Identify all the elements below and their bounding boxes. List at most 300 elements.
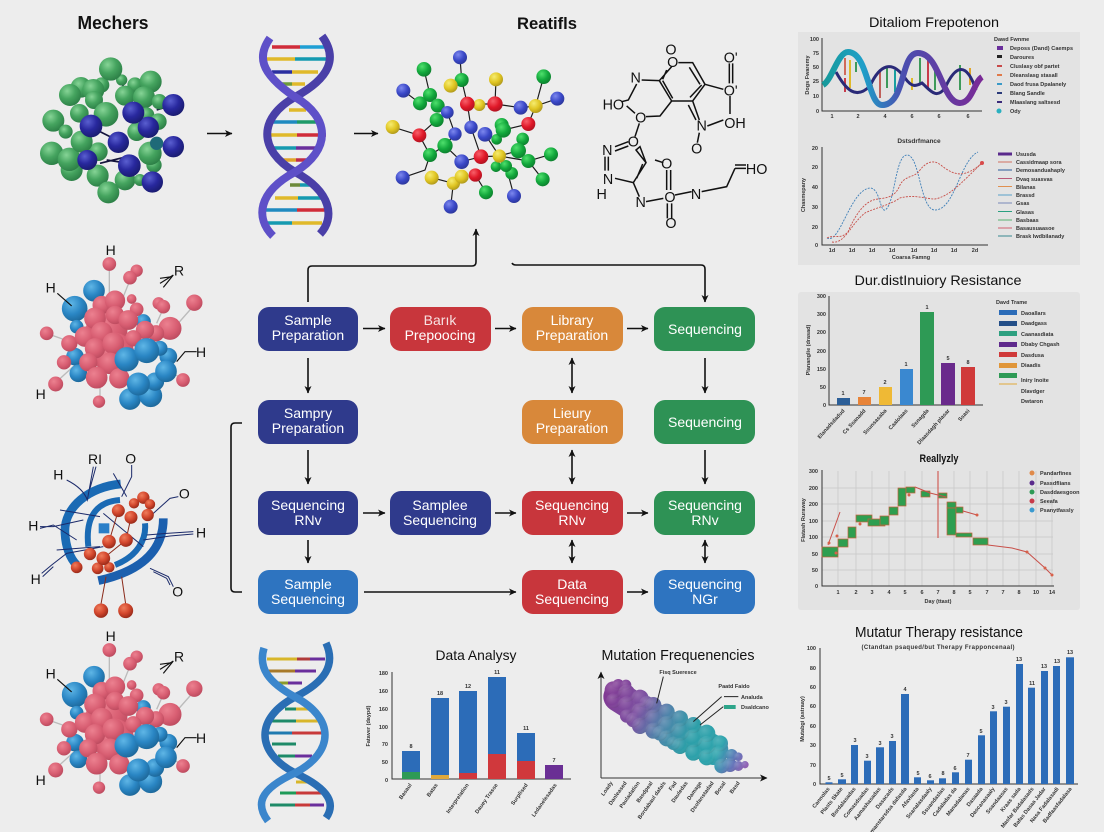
chart: resistance bars: 150 (817, 367, 826, 373)
flow bracket (231, 423, 242, 592)
flow box: Sequencing RNv red: RNv (558, 512, 586, 528)
heading: Data Analysy: Data Analysy (436, 647, 516, 663)
chart: dashed curves: 1d (849, 248, 855, 254)
chart: dashed curves: Gsas (1016, 201, 1029, 207)
chart: DNA waveform: 6 (937, 114, 941, 120)
flow box: Library Preparation (522, 307, 623, 351)
chemical structure diagram (596, 43, 767, 232)
chart: DNA waveform: 25 (813, 79, 819, 85)
flow box: Sample Sequencing (258, 570, 358, 614)
molecule: pink and blue cluster, row 4: R (174, 649, 184, 665)
chart: dashed curves: Glasas (1016, 210, 1034, 216)
flow box: Bank Prepoocing (390, 307, 491, 351)
chart: DNA waveform: Dogs Fwaremy (805, 54, 811, 95)
flow box: Sample Preparation: Preparation (272, 327, 344, 343)
chart: DNA waveform: Deposs (Dand) Caemps (1010, 46, 1073, 52)
flow box: Library Preparation: Library (551, 312, 593, 328)
chart: dashed curves: 0 (815, 243, 818, 249)
chart: data analysis stacked bars: 12 (465, 684, 471, 690)
chart: resistance bars: 300 (817, 294, 826, 300)
chart: dashed curves: Dvaq suasvas (1016, 177, 1053, 183)
chemical structure diagram: O (667, 55, 678, 71)
arrow: molecule to DNA (207, 132, 232, 134)
chart: resistance bars: 5 (946, 356, 950, 362)
chart: mutation therapy bars: 3 (991, 705, 995, 711)
chart: resistance bars: Caalolaas (888, 408, 909, 431)
chart: mutation therapy bars: Dasacads (875, 787, 896, 810)
chart: dashed curves: 20 (812, 165, 818, 171)
chart: DNA waveform: 10 (813, 94, 819, 100)
chart: mutation therapy bars: 60 (810, 724, 816, 730)
panel: DNA line charts (798, 32, 1080, 265)
chart: step line chart: 50 (812, 568, 818, 574)
chart: dashed curves: Basbaas (1016, 218, 1039, 224)
chart: resistance bars: 300 (817, 312, 826, 318)
chart: step line chart: 10 (1033, 590, 1039, 596)
chemical structure diagram: N (691, 187, 701, 203)
chart: resistance bars: Cs Ssanadd (842, 408, 867, 436)
chart: mutation frequency blob: Danleased (608, 781, 629, 807)
chart: step line chart: 8 (1017, 590, 1021, 596)
chart: dashed curves: 1d (931, 248, 937, 254)
heading: Mutation Frequenencies: Mutation Frequenencies (602, 648, 754, 664)
molecule: blue ribbon with red spheres: O (179, 485, 190, 501)
chart: step line chart: 2 (854, 590, 858, 596)
chart: step line chart: 0 (815, 584, 818, 590)
chemical structure diagram: O (665, 216, 677, 232)
chart: DNA waveform: Cluslasy obf partet (1010, 64, 1060, 70)
chart: dashed curves: Cassidmaap sora (1016, 160, 1062, 166)
flow box: Sampry Preparation (258, 400, 358, 444)
chart: mutation therapy bars: Ssandaasas (985, 787, 1010, 815)
chart: dashed curves: Demosanduahaply (1016, 168, 1066, 174)
chart: dashed curves: 1d (829, 248, 835, 254)
chart: data analysis stacked bars: Basaul (398, 782, 414, 801)
chart: data analysis stacked bars: 160 (379, 707, 388, 713)
chart: step line chart (801, 469, 1080, 605)
chemical structure diagram: O (691, 141, 702, 157)
chart: dashed curves: 30 (812, 205, 818, 211)
chart: mutation therapy bars: 100 (807, 646, 816, 652)
chart: data analysis stacked bars: 180 (379, 671, 388, 677)
chart: resistance bars: 200 (817, 330, 826, 336)
chart: data analysis stacked bars: 11 (523, 726, 529, 732)
chart: mutation therapy bars: Comasdsadas (843, 787, 871, 820)
chart: mutation therapy bars: 5 (916, 771, 920, 777)
chart: mutation frequency blob: Basd (729, 781, 742, 795)
molecule: pink and blue cluster, row 2: H (36, 386, 46, 402)
molecule: pink and blue cluster, row 2: H (106, 242, 116, 258)
chart: DNA waveform: 75 (813, 51, 819, 57)
chart: mutation frequency blob: Basdpeal (636, 780, 655, 804)
chart: mutation frequency blob: Paatd Faido (718, 684, 750, 690)
chart: resistance bars: Diaadis (1021, 363, 1041, 369)
molecule: pink and blue cluster, row 4: H (106, 628, 116, 644)
flow box: Sequencing: Sequencing (668, 321, 742, 337)
chemical structure diagram: HO (603, 97, 624, 113)
chart: step line chart: 8 (952, 590, 956, 596)
chart: dashed curves (801, 138, 1066, 261)
chart: step line chart: 5 (903, 590, 907, 596)
molecule: pink and blue cluster, row 2: H (196, 344, 206, 360)
chart: data analysis stacked bars: 160 (379, 689, 388, 695)
chemical structure diagram: O (665, 43, 677, 59)
flow box: Bank Prepoocing: Barık (424, 312, 457, 328)
chart: resistance bars: 1 (904, 362, 908, 368)
molecule: blue ribbon with red spheres: O (172, 584, 183, 600)
flow box: Library Preparation: Preparation (536, 327, 608, 343)
chart: step line chart: 300 (809, 469, 818, 475)
chart: mutation therapy bars: Manadalanas (946, 787, 972, 817)
chart: dashed curves: 40 (812, 185, 818, 191)
chart: mutation therapy bars: 8 (941, 771, 945, 777)
molecule: blue ribbon with red spheres: RI (88, 451, 102, 467)
chart: dashed curves: 1d (951, 248, 957, 254)
chemical structure diagram: O (635, 111, 646, 127)
chart: DNA waveform: Mlaaslang saltsesd (1010, 100, 1060, 106)
molecule: pink and blue cluster, row 2: R (174, 263, 184, 279)
flow box: Sequencing (654, 307, 755, 351)
chart: step line chart: 7 (936, 590, 940, 596)
DNA helix: purple (262, 36, 330, 236)
chart: mutation therapy bars: 0 (813, 782, 816, 788)
heading: Mutatur Therapy resistance: Mutatur Therapy resistance (855, 625, 1023, 641)
chart: resistance bars: Davd Trame (996, 300, 1027, 306)
chart: DNA waveform: 1 (830, 114, 834, 120)
chart: mutation therapy bars: Kraas sada (1000, 786, 1023, 813)
heading: Reatifls: Reatifls (517, 14, 577, 33)
subheading: therapy frequencies: (Ctandtan psaqued/but Therapy Frapponcenaal) (862, 645, 1014, 651)
chart: data analysis stacked bars: 8 (409, 744, 413, 750)
chart: resistance bars: 8 (966, 360, 970, 366)
chart: mutation frequency blob: Loady (600, 780, 615, 797)
chart: mutation therapy bars: 7 (966, 753, 970, 759)
chart: mutation therapy bars: Dasaada (966, 786, 985, 808)
heading: Ditaliom Frepotenon: Ditaliom Frepotenon (869, 14, 999, 30)
molecule: blue ribbon with red spheres: H (31, 571, 41, 587)
chart: data analysis stacked bars (366, 670, 571, 818)
chart: dashed curves: Bilanas (1016, 185, 1036, 191)
flow box: Sequencing NGr: Sequencing (668, 576, 742, 592)
chart: DNA waveform: 2 (856, 114, 860, 120)
chart: step line chart: Psanytfassly (1040, 508, 1075, 514)
chart: DNA waveform (805, 37, 1073, 120)
chemical structure diagram: N (630, 71, 641, 87)
chart: mutation frequency blob: Bosal (714, 780, 728, 796)
arrow: DNA to ball and stick (354, 132, 378, 134)
flow box: Sequencing 2 (654, 400, 755, 444)
chart: data analysis stacked bars: 70 (382, 742, 388, 748)
molecule: pink and blue cluster, row 4 (36, 628, 206, 795)
chart: dashed curves: Coarsa Famng (892, 255, 930, 261)
molecule: pink and blue cluster, row 2: H (46, 279, 56, 295)
chart: mutation therapy bars: Cannolas (812, 787, 832, 810)
chart: mutation therapy bars: 3 (878, 741, 882, 747)
chart: dashed curves: Basausuaasoe (1016, 226, 1055, 232)
chart: step line chart: 200 (809, 502, 818, 508)
chart: mutation therapy bars: 3 (1004, 700, 1008, 706)
chart: mutation therapy bars: 5 (840, 773, 844, 779)
flow box: Lieury Preparation (522, 400, 623, 444)
chemical structure diagram: N (602, 143, 613, 159)
chart: step line chart: 14 (1049, 590, 1056, 596)
flow box: Sequencing RNv: Sequencing (271, 497, 345, 513)
chart: resistance bars: Dlaasdagh plasar (917, 408, 952, 446)
chemical structure diagram: O' (724, 83, 738, 99)
chart: mutation frequency blob: Dauledas (671, 781, 690, 804)
flow box: Sequencing 2: Sequencing (668, 414, 742, 430)
chemical structure diagram: O (664, 190, 676, 206)
chart: mutation therapy bars: Bafas Dasaa Jadar (1013, 786, 1048, 829)
chart: resistance bars: Elanadsdadud (817, 408, 846, 440)
chart: step line chart: 3 (870, 590, 874, 596)
chart: step line chart: Passdflians (1040, 481, 1071, 487)
chart: step line chart: Dasddaesgoon (1040, 490, 1080, 496)
flow box: Sequencing RNv green (654, 491, 755, 535)
heading: Mechers: Mechers (78, 13, 148, 33)
molecule: pink and blue cluster, row 4: H (196, 730, 206, 746)
flow connector: right to sequencing (512, 263, 705, 302)
flow box: Samplee Sequencing: Sequencing (403, 512, 477, 528)
chart: mutation therapy bars: 3 (890, 734, 894, 740)
flow box: Sequencing RNv green: Sequencing (668, 497, 742, 513)
chart: mutation therapy bars: Mutabgi (astraay) (800, 696, 806, 742)
chart: step line chart: 6 (920, 590, 924, 596)
chart: resistance bars: Ssunsasaba (863, 408, 889, 436)
heading: Duredistinuudory Resistance: Dur.distInuiory Resistance (854, 272, 1022, 288)
chart: mutation therapy bars: 13 (1016, 657, 1022, 663)
chart: data analysis stacked bars: 0 (385, 778, 388, 784)
chart: DNA waveform: Blang Sandle (1010, 91, 1045, 97)
chart: dashed curves: Dstsdrfmance (897, 138, 941, 145)
chart: dashed curves: 20 (812, 146, 818, 152)
chemical structure diagram: HO (746, 162, 767, 178)
chart: data analysis stacked bars: 18 (437, 691, 443, 697)
chart: step line chart: Day (ttast) (925, 599, 952, 605)
chart: mutation frequency blob: Analuda (741, 695, 764, 701)
chart: step line chart: 100 (809, 535, 818, 541)
chart: resistance bars: Daadgass (1021, 321, 1047, 327)
chart: DNA waveform: Ody (1010, 109, 1022, 115)
flow box: Sequencing NGr (654, 570, 755, 614)
flow box: Sampry Preparation: Preparation (272, 420, 344, 436)
chart: step line chart: 200 (809, 486, 818, 492)
chart: resistance bars: Ssnagda (911, 408, 931, 429)
chart: resistance bars: Ssasi (957, 408, 972, 423)
chart: resistance bars: 200 (817, 349, 826, 355)
chart: resistance bars: 2 (883, 380, 887, 386)
chart: resistance bars: 50 (820, 385, 826, 391)
chart: resistance bars: Dlavdger (1021, 389, 1045, 395)
chart: mutation therapy bars: Ssanalasdaaly (906, 786, 934, 820)
chart: step line chart: Seeafa (1040, 499, 1059, 505)
chart: mutation therapy bars: 11 (1029, 681, 1035, 687)
molecule: blue ribbon with red spheres: O (125, 450, 136, 466)
chart: data analysis stacked bars: Fataver (daypd) (366, 705, 372, 746)
chart: step line chart: 4 (887, 590, 891, 596)
chart: dashed curves: 20 (812, 225, 818, 231)
chemical structure diagram: N (603, 172, 613, 188)
chart: data analysis stacked bars: 100 (379, 725, 388, 731)
chart: mutation therapy bars: Bordalasadas (831, 787, 858, 819)
chemical structure diagram: H (596, 187, 607, 203)
chart: resistance bars: Dasdusa (1021, 353, 1045, 359)
chart: DNA waveform: Daod frusa Dpalanely (1010, 82, 1067, 88)
chart: step line chart: Pandarfines (1040, 471, 1071, 477)
chart: mutation therapy bars: Dascanasaaly (969, 786, 997, 819)
chart: mutation therapy bars: 3 (853, 738, 857, 744)
chart: mutation therapy bars: 60 (810, 704, 816, 710)
molecule: blue ribbon with red spheres: H (53, 466, 63, 482)
chart: dashed curves: Brassd (1016, 193, 1035, 199)
chemical structure diagram: O (628, 135, 639, 151)
chart: mutation frequency blob: Damage (686, 781, 704, 802)
chart: DNA waveform: 50 (813, 65, 819, 71)
chart: step line chart: 7 (1001, 590, 1005, 596)
molecule: pink and blue cluster, row 4: H (36, 772, 46, 788)
molecule: pink and blue cluster, row 2 (36, 242, 206, 409)
chart: data analysis stacked bars: Surplised (510, 783, 530, 807)
heading: Reallyzly: Reallyzly (920, 453, 959, 465)
molecule: pink and blue cluster, row 4: H (46, 665, 56, 681)
chart: resistance bars: Plananglie (drasad) (806, 324, 812, 375)
chart: mutation therapy bars: 30 (810, 743, 816, 749)
chart: mutation frequency blob: Fisq Sueresce (659, 670, 697, 676)
chart: mutation therapy bars (800, 646, 1078, 832)
flow connector: up to ball and stick molecule (308, 229, 476, 302)
chart: data analysis stacked bars: Batas (426, 783, 440, 798)
chart: step line chart: 100 (809, 519, 818, 525)
chart: mutation therapy bars: Afavlasta (901, 786, 921, 810)
chart: DNA waveform: Daroures (1010, 55, 1034, 61)
flow box: Data Sequencing (522, 570, 623, 614)
chart: resistance bars: Daoallars (1021, 311, 1046, 317)
DNA helix: blue (261, 643, 330, 821)
chart: resistance bars: 7 (862, 390, 866, 396)
chart: step line chart: 1 (836, 590, 840, 596)
flow arrows between boxes (308, 328, 705, 592)
flow box: Data Sequencing: Data (557, 576, 587, 592)
chart: DNA waveform: 6 (910, 114, 914, 120)
chart: dashed curves: Ususda (1016, 152, 1037, 158)
chart: mutation frequency blob: Dsofanstadad (690, 781, 716, 814)
chart: mutation therapy bars: 6 (953, 766, 957, 772)
panel: resistance charts (798, 292, 1080, 610)
chart: data analysis stacked bars: 11 (494, 670, 500, 676)
chart: resistance bars: Dwtaron (1021, 399, 1044, 405)
chart: mutation therapy bars: 5 (827, 776, 831, 782)
flow box: Lieury Preparation: Preparation (536, 420, 608, 436)
flow box: Sample Sequencing: Sequencing (271, 591, 345, 607)
flow box: Samplee Sequencing (390, 491, 491, 535)
chart: mutation frequency blob (600, 670, 769, 821)
chart: mutation therapy bars: 13 (1067, 650, 1073, 656)
chart: dashed curves: 1d (889, 248, 895, 254)
chemical structure diagram: O' (724, 50, 738, 66)
chart: mutation therapy bars: 5 (979, 729, 983, 735)
chart: data analysis stacked bars: 50 (382, 760, 388, 766)
chart: DNA waveform: Dawd Fwnme (994, 37, 1029, 43)
molecule: blue ribbon with red spheres: H (196, 524, 206, 540)
chemical structure diagram: N (696, 119, 707, 135)
chart: mutation frequency blob: Pauladation (619, 780, 642, 810)
chart: data analysis stacked bars: Ledanelesadas (531, 783, 559, 818)
chart: mutation therapy bars: 3 (865, 754, 869, 760)
chart: mutation therapy bars: Masfar Badalasads (1000, 787, 1036, 830)
chart: DNA waveform: 100 (810, 37, 819, 43)
chart: DNA waveform: 4 (883, 114, 887, 120)
chart: mutation therapy bars: Plasts Skate (820, 787, 845, 816)
chart: step line chart: 7 (985, 590, 989, 596)
flow box: Sampry Preparation: Sampry (284, 405, 332, 421)
chart: DNA waveform: 6 (966, 114, 970, 120)
chart: dashed curves: 1d (869, 248, 875, 254)
chart: step line chart: 5 (968, 590, 972, 596)
chart: mutation therapy bars: Aamashasadas (853, 787, 883, 822)
flow box: Sequencing RNv red: Sequencing (535, 497, 609, 513)
chart: resistance bars: 1 (841, 391, 845, 397)
chart: DNA waveform: Dleanslasg stasall (1010, 73, 1058, 79)
flow box: Samplee Sequencing: Samplee (412, 497, 468, 513)
chemical structure diagram: N (635, 195, 646, 211)
molecule: blue ribbon with red spheres (28, 450, 206, 618)
chart: dashed curves: Brask Iwdbilanady (1016, 234, 1065, 240)
chart: mutation therapy bars: 13 (1041, 664, 1047, 670)
flow box: Sequencing RNv: RNv (294, 512, 322, 528)
chart: mutation therapy bars: Ssuandaslas (921, 787, 947, 817)
molecule: blue ribbon with red spheres: H (28, 518, 38, 534)
chart: resistance bars: 0 (823, 403, 826, 409)
chart: mutation therapy bars: 80 (810, 666, 816, 672)
chart: step line chart: 50 (812, 552, 818, 558)
chart: mutation therapy bars: Nasa Fadalasadi (1029, 786, 1061, 824)
chart: mutation therapy bars: 13 (1054, 659, 1060, 665)
flow box: Sample Sequencing: Sample (284, 576, 332, 592)
chart: mutation therapy bars: Cadaladas da (932, 786, 959, 818)
chart: dashed curves: Chasmepany (801, 177, 807, 212)
chart: mutation frequency blob: Dsaldcano (741, 705, 769, 711)
chart: mutation therapy bars: 4 (903, 687, 907, 693)
chart: resistance bars: Iniry Inoite (1021, 378, 1049, 384)
flow box: Data Sequencing: Sequencing (535, 591, 609, 607)
flow box: Sequencing RNv (258, 491, 358, 535)
chemical structure diagram: OH (724, 116, 746, 132)
chart: resistance bars: Caanasdiata (1021, 332, 1054, 338)
chart: resistance bars (806, 294, 1060, 446)
flow box: Sequencing RNv red (522, 491, 623, 535)
flow box: Sample Preparation (258, 307, 358, 351)
chemical structure diagram: O (661, 157, 672, 173)
chart: resistance bars: 1 (925, 305, 929, 311)
chart: data analysis stacked bars: Interprelation (446, 782, 471, 815)
chart: dashed curves: 1d (911, 248, 917, 254)
chart: step line chart: Flatash Ruraway (801, 497, 807, 542)
flow box: Bank Prepoocing: Prepoocing (405, 327, 475, 343)
flow box: Sequencing RNv green: RNv (691, 512, 719, 528)
flow box: Sequencing NGr: NGr (692, 591, 718, 607)
chart: data analysis stacked bars: Dauey Trasse (474, 783, 500, 815)
ball and stick molecule (386, 51, 564, 213)
molecule: green and navy spheres (41, 58, 184, 202)
chart: data analysis stacked bars: 7 (552, 758, 556, 764)
chart: mutation therapy bars: 6 (928, 774, 932, 780)
chart: mutation therapy bars: 70 (810, 763, 816, 769)
chart: DNA waveform: 0 (816, 109, 819, 115)
chart: mutation therapy bars: 60 (810, 685, 816, 691)
flow box: Lieury Preparation: Lieury (553, 405, 591, 421)
chart: mutation frequency blob: Bordabaul dafals (637, 781, 668, 821)
flow box: Sample Preparation: Sample (284, 312, 332, 328)
